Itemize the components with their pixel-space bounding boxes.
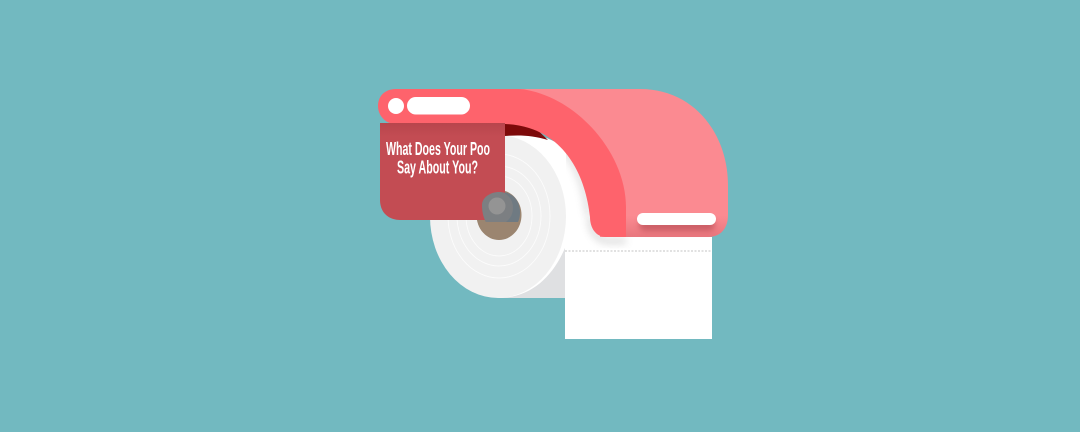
toilet roll xyxy=(430,135,600,298)
panel title: What Does Your Poo xyxy=(386,139,490,159)
white pill: top xyxy=(407,97,470,114)
icon: white dot xyxy=(388,98,404,114)
axle front highlight xyxy=(488,198,506,214)
dark wedge behind arm xyxy=(505,123,548,140)
roll core hole xyxy=(476,190,522,240)
pill shadow xyxy=(639,219,715,231)
white pill: bottom xyxy=(637,213,716,225)
paper sheet xyxy=(565,237,712,339)
cover lower shade xyxy=(626,225,726,237)
label panel: Say About You? xyxy=(397,158,478,178)
holder axle xyxy=(482,192,520,222)
roll end face xyxy=(430,135,566,298)
holder light pink cover xyxy=(520,89,728,237)
illustration: toilet paper roll with holder xyxy=(378,89,728,339)
holder red arm shadow on roll xyxy=(540,135,626,246)
roll rings xyxy=(448,154,550,278)
holder red arm xyxy=(378,89,626,237)
axle front over panel corner xyxy=(482,192,505,222)
label panel xyxy=(380,123,505,220)
roll under shadow xyxy=(498,248,565,298)
roll outer body xyxy=(498,135,600,298)
